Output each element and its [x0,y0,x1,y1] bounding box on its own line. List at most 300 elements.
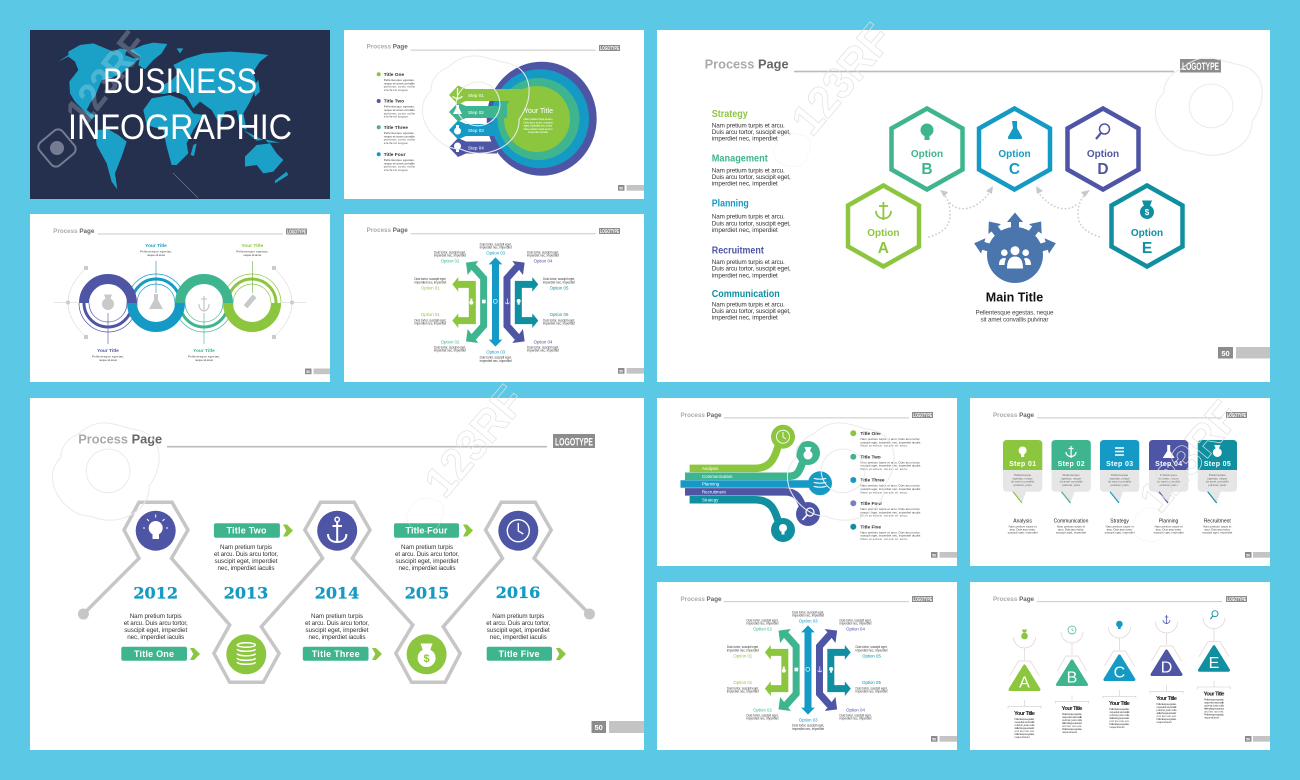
option labels: imperdiet nec, imperdiet [543,280,575,284]
option labels: imperdiet nec, imperdiet [543,322,575,326]
card: step 03 [1100,440,1139,503]
left legend: Title Four [384,152,406,158]
timeline body text: suscipit eget, imperdiet [487,627,550,634]
hexagon E: E [1142,240,1152,257]
card captions: Nam pretium turpis et [1057,524,1085,528]
card: step 01: pulvinar, justo [1014,483,1032,487]
option labels: imperdiet nec, imperdiet [746,717,779,721]
hexagon B: Option [911,149,943,160]
triangle E: Your Title [1204,692,1225,698]
right text list: suscipit eget, imperdiet nec, imperdiet iaculis [860,510,921,514]
card captions: Analysis [1013,519,1032,525]
card captions: Nam pretium turpis et [1009,524,1037,528]
icon: money bag 2015: $ [424,653,430,665]
header: LOGOTYPE [1227,597,1246,603]
footer page number: 50 [619,370,623,374]
option labels: Duis tortor, suscipit eget, [746,713,779,717]
card: step 02: Step 02 [1058,461,1085,468]
timeline body text [124,544,551,641]
triangle C: eleifend augue, ac auctor [1109,716,1129,720]
option labels: Duis tortor, suscipit eget, [855,645,888,649]
footer page number [592,721,644,733]
right text list: Title Two [860,454,881,460]
watermark overlay: 123RF [57,24,157,134]
header [680,412,933,419]
card captions: suscipit eget, imperdiet [1056,530,1086,534]
footer page number [1245,552,1270,558]
option labels: Option 01 [733,653,753,658]
card captions: suscipit eget, imperdiet [1105,530,1135,534]
option labels [414,242,575,363]
option labels: Option 02 [441,340,460,345]
branch labels: Strategy [702,497,719,502]
left text list: imperdiet nec, imperdiet [712,136,778,143]
left text list: Duis arcu tortor, suscipit eget, [712,266,791,273]
option labels: Option 04 [846,627,865,632]
triangle A: eleifend augue, ac auctor [1014,726,1035,730]
triangle C: orci leo non est. [1109,719,1130,723]
option labels: Option 01 [421,312,440,317]
footer page number: 50 [1246,554,1250,558]
left text list: Management [712,154,768,164]
panel: linked rings [30,214,330,382]
left legend: eleifend augue [384,141,408,145]
option labels: Option 03 [799,718,818,723]
main title [976,290,1054,324]
card captions: arcu. Duis arcu tortor, [1058,528,1084,532]
header: LOGOTYPE [913,597,932,603]
option labels: Duis tortor, suscipit eget, [839,618,872,622]
option labels: Duis tortor, suscipit eget, [839,713,872,717]
option labels: imperdiet nec, imperdiet [527,254,559,258]
option labels: Option 01 [421,285,440,290]
timeline body text: Nam pretium turpis [401,544,453,551]
step arrows [449,86,522,157]
panel: timeline [30,398,644,750]
triangle E: E [1209,655,1219,672]
card: step 04: Step 04 [1155,461,1182,468]
card captions: Nam pretium turpis et [1155,524,1183,528]
left legend: pulvinar, justo nulla [384,138,415,142]
option labels: Duis tortor, suscipit eget, [480,242,512,246]
triangle C: neque sit amet [1109,725,1125,729]
step arrows: Step 04 [468,146,484,150]
right text list: Title One [860,431,881,437]
triangle D: neque sit amet convallis [1156,705,1177,709]
panel: step cards [970,398,1270,566]
option labels: Option 02 [753,627,772,632]
right text list: Title Five [860,524,881,530]
option labels: Duis tortor, suscipit eget, [543,318,575,322]
hexagon E [1112,186,1182,266]
card captions: Strategy [1110,519,1129,525]
card captions: arcu. Duis arcu tortor, [1156,528,1182,532]
option labels: imperdiet nec, imperdiet [434,254,466,258]
header [367,45,620,52]
branch labels: Analysis [702,466,719,471]
right text list [850,430,921,541]
left legend: neque sit amet convallis [384,81,415,85]
left text list: Recruitment [712,246,764,256]
icon: coin stack 2013 [226,634,266,674]
title pills with chevrons [121,523,566,661]
icon: anchor 2014 [317,511,357,551]
option labels: Duis tortor, suscipit eget, [792,610,824,614]
option labels: Duis tortor, suscipit eget, [527,250,559,254]
triangle D: Pellentesque egestas, [1156,717,1177,721]
arrow icons [782,666,833,673]
left text list: Duis arcu tortor, suscipit eget, [712,174,791,181]
option labels: imperdiet nec, imperdiet [839,717,872,721]
footer page number: 50 [619,186,623,190]
left text list: Duis arcu tortor, suscipit eget, [712,220,791,227]
option labels: Duis tortor, suscipit eget, [434,250,466,254]
left text list: Nam pretium turpis et arcu. [712,214,785,221]
card captions: Planning [1159,519,1179,525]
card captions [1008,519,1232,534]
card: step 03: egestas, neque [1110,476,1130,480]
side decoration arcs [54,266,306,339]
option labels: Duis tortor, suscipit eget, [414,277,446,281]
zigzag hexagon line [78,502,595,682]
card: step 02: egestas, neque [1061,476,1081,480]
panel: radial arrows [344,214,644,382]
card: step 04: pulvinar, justo [1160,483,1178,487]
right text list: suscipit eget, imperdiet nec, imperdiet iaculis [860,464,921,468]
header: Process Page [367,45,408,51]
ring icons [102,294,256,311]
triangle E: eleifend augue, ac auctor [1204,707,1224,711]
left legend: pulvinar, justo nulla [384,165,415,169]
ring labels: Pellentesque egestas, [188,354,220,358]
card captions: Nam pretium turpis et [1106,524,1134,528]
triangle C: Pellentesque egestas, [1109,722,1130,726]
circle title text: Nam pretium turpis et arcu [524,127,553,131]
timeline body text: et arcu. Duis arcu tortor, [214,551,278,558]
option labels: Option 03 [799,619,818,624]
triangle A: Your Title [1014,711,1036,717]
arrow diagram [727,610,888,731]
header [705,56,1221,73]
option labels: imperdiet nec, imperdiet [792,727,824,731]
timeline body text: nec, imperdiet iaculis [127,634,184,641]
icon: clock 2016 [498,511,538,551]
triangle A: Pellentesque egestas, [1014,732,1035,736]
hexagon E: $ [1145,208,1150,217]
arrow diagram [414,242,575,363]
step arrows: Step 03 [468,128,484,133]
hexagon D: Option [1087,149,1119,160]
header: LOGOTYPE [913,413,932,419]
cover title: INFOGRAPHIC [68,108,292,147]
right text list: Nam pretium turpis et arcu. [860,514,909,518]
ring labels [92,243,268,362]
triangle D: eleifend augue, ac auctor [1156,711,1177,715]
triangle D: Pellentesque egestas, [1156,702,1177,706]
ring labels: neque sit amet [99,358,117,362]
left text list: Nam pretium turpis et arcu. [712,122,785,129]
card captions: arcu. Duis arcu tortor, [1107,528,1133,532]
card: step 02: sit amet convallis [1060,480,1083,484]
left text list: Communication [712,289,780,300]
right text list: Title Four [860,501,882,507]
left legend: pulvinar, justo nulla [384,85,415,89]
right text list: Nam pretium turpis et arcu. Duis arcu tortor, [860,484,921,488]
triangle E: neque sit amet [1204,716,1219,720]
footer page number [931,736,957,742]
years: 2013 [224,584,268,602]
footer page number [931,552,957,558]
ring labels: Your Title [241,243,263,249]
footer page number [618,185,644,191]
left text list: imperdiet nec, imperdiet [712,181,778,188]
triangle D: neque sit amet [1156,720,1172,724]
header: Process Page [705,56,789,72]
arrow icons [469,298,521,305]
hexagon A: Option [867,228,900,239]
header [367,228,620,235]
card captions: suscipit eget, imperdiet [1008,530,1038,534]
ring labels: neque sit amet [147,253,165,257]
card: step 04: Pellentesque [1160,473,1177,477]
title pills with chevrons: Title Two [226,526,267,536]
option labels: imperdiet nec, imperdiet [527,349,559,353]
step arrows: Step 02 [468,110,484,115]
right text list: suscipit eget, imperdiet nec, imperdiet iaculis [860,534,921,538]
option labels: Duis tortor, suscipit eget, [414,318,446,322]
left legend: pulvinar, justo nulla [384,111,415,115]
card: step 05: Step 05 [1204,461,1231,468]
left text list: Nam pretium turpis et arcu. [712,259,785,266]
option labels: imperdiet nec, imperdiet [480,246,512,250]
left text list: Strategy [712,109,748,120]
title pills with chevrons: Title One [134,649,174,659]
option labels: Duis tortor, suscipit eget, [792,724,824,728]
cover title [68,62,292,147]
ring labels: Pellentesque egestas, [92,354,124,358]
watermark overlay: 123RF [415,377,535,506]
triangle C [1103,621,1136,729]
header: Process Page [993,413,1035,419]
concentric circles [487,62,597,176]
triangle D: D [1161,660,1172,676]
card: step 04: sit amet convallis [1157,480,1181,484]
world map [58,43,288,189]
triangle D: Your Title [1156,696,1178,702]
left legend: eleifend augue [384,115,408,119]
hexagon C [979,108,1050,190]
option labels: Option 05 [550,285,569,290]
cover title: BUSINESS [103,62,257,101]
option labels: imperdiet nec, imperdiet [480,359,512,363]
triangle B: orci leo non est. [1062,724,1082,728]
option labels: imperdiet nec, imperdiet [855,690,888,694]
card: step 02: pulvinar, justo [1062,483,1080,487]
footer page number: 50 [932,738,936,742]
option labels: Option 02 [753,708,772,713]
header: Process Page [993,597,1035,603]
triangle C: Pellentesque egestas, [1109,707,1130,711]
card: step 05: sit amet convallis [1206,480,1229,484]
circle title text: Duis arcu tortor, suscipit [524,120,553,124]
option labels: imperdiet nec, imperdiet [434,349,466,353]
left legend: neque sit amet convallis [384,108,415,112]
timeline body text: nec, imperdiet iaculis [398,565,456,572]
card: step 05 [1198,440,1237,503]
footer page number: 50 [1246,738,1250,742]
connector arrows [108,261,252,344]
option labels: Duis tortor, suscipit eget, [727,686,759,690]
header [78,432,595,448]
branch labels: Planning [702,482,720,487]
triangle D [1150,615,1183,724]
timeline body text: et arcu. Duis arcu tortor, [395,551,459,558]
title pills with chevrons: Title Three [312,649,360,659]
ring labels: Your Title [193,348,215,354]
hexagon A: A [878,240,889,257]
right text list: Nam pretium turpis et arcu. [860,537,909,541]
option labels: imperdiet nec, imperdiet [792,614,824,618]
circle title text [524,108,553,134]
left text list: Nam pretium turpis et arcu. [712,301,785,308]
timeline body text: suscipit eget, imperdiet [396,558,459,565]
option labels: imperdiet nec, imperdiet [839,622,872,626]
triangle B: B [1067,670,1077,686]
option labels: Option 05 [862,680,881,685]
triangle E [1198,611,1230,720]
years: 2014 [315,584,359,602]
right text list: Nam pretium turpis et arcu. [860,444,909,448]
card: step 01: sit amet convallis [1011,480,1035,484]
years: 2015 [405,584,449,602]
triangle A: A [1019,674,1030,692]
timeline body text: suscipit eget, imperdiet [124,627,187,634]
right text list: Nam pretium turpis et arcu. Duis arcu tortor, [860,530,921,534]
triangle C: neque sit amet convallis [1109,710,1130,714]
left legend: eleifend augue [384,88,408,92]
option labels: Duis tortor, suscipit eget, [543,277,575,281]
left text list: Duis arcu tortor, suscipit eget, [712,129,791,136]
panel: branching process [657,398,957,566]
footer page number: 50 [306,370,310,374]
footer page number [1218,347,1270,358]
timeline body text: et arcu. Duis arcu tortor, [305,620,369,627]
option labels: Option 05 [550,312,569,317]
header: Process Page [53,229,95,235]
main title: Main Title [986,290,1043,304]
hexagon B [892,108,962,190]
triangle A: neque sit amet [1014,735,1030,739]
branch labels: Recruitment [702,490,726,494]
panel: radial arrows second [657,582,957,750]
branch labels: Communication [702,474,733,479]
header: LOGOTYPE [1227,413,1246,419]
panel: cover with world map [30,30,330,199]
timeline body text: nec, imperdiet iaculis [490,634,547,641]
card: step 01: egestas, neque [1013,476,1033,480]
icon: money bag 2015 [407,634,447,674]
timeline body text: Nam pretium turpis [311,613,363,620]
card captions: suscipit eget, imperdiet [1202,530,1232,534]
triangle A: pulvinar, justo nulla [1014,723,1035,727]
triangle C: C [1114,664,1125,682]
timeline body text: Nam pretium turpis [492,613,544,620]
option labels: Option 04 [534,340,553,345]
card captions: Communication [1054,519,1089,525]
triangle A: Pellentesque egestas, [1014,717,1035,721]
footer page number: 50 [932,554,936,558]
option labels: Duis tortor, suscipit eget, [746,618,779,622]
thin ring halves [79,274,281,332]
circle title text: eget, imperdiet nec, imper [524,124,553,128]
footer page number [1245,736,1270,742]
right text list: Nam pretium turpis et arcu. [860,467,909,471]
hexagon B: B [921,161,933,178]
right text list: Title Three [860,478,885,484]
triangle E: orci leo non est. [1204,710,1224,714]
left legend: neque sit amet convallis [384,134,415,138]
triangle B: neque sit amet [1062,730,1077,734]
timeline body text: nec, imperdiet iaculis [218,565,274,572]
icon: lightbulb 2012 [136,511,176,551]
option labels: Option 02 [441,259,460,264]
watermark overlay: 123RF [1130,392,1250,521]
triangle A: neque sit amet convallis [1014,720,1035,724]
card: step 02 [1052,440,1091,503]
footer page number [618,368,644,374]
triangle B: neque sit amet convallis [1062,715,1083,719]
branches [680,444,815,523]
triangle A [1008,630,1041,739]
triangle B: pulvinar, justo nulla [1062,718,1082,722]
left legend: Pellentesque egestas, [384,131,415,135]
ring labels: neque sit amet [243,253,261,257]
triangle E: neque sit amet convallis [1204,701,1225,705]
circle title text: imperdiet iaculis [528,130,549,134]
panel: stepped triangles [970,582,1270,750]
right text list: suscipit eget, imperdiet nec, imperdiet iaculis [860,440,921,444]
left legend: Title One [384,72,404,78]
ring labels: Pellentesque egestas, [236,250,268,254]
card: step 05: pulvinar, justo [1208,483,1227,487]
triangle E: pulvinar, justo nulla [1204,704,1224,708]
card captions: suscipit eget, imperdiet [1154,530,1184,534]
left text list: Duis arcu tortor, suscipit eget, [712,308,791,315]
header [993,596,1247,603]
left text list: imperdiet nec, imperdiet [712,315,778,322]
left legend: Pellentesque egestas, [384,105,415,109]
timeline body text: suscipit eget, imperdiet [214,558,278,565]
left legend: Title Three [384,125,408,131]
option labels: Duis tortor, suscipit eget, [434,345,466,349]
footer page number [305,368,330,374]
option labels: Option 04 [534,259,553,264]
card: step 01: Pellentesque [1014,473,1031,477]
triangle D: pulvinar, justo nulla [1156,708,1177,712]
left legend [377,72,415,172]
timeline body text: Nam pretium turpis [130,613,182,620]
branch nodes with icons [771,425,832,542]
header: Process Page [367,228,408,234]
left legend: neque sit amet convallis [384,161,415,165]
years: 2016 [496,583,540,602]
option labels [727,610,888,731]
option labels: Duis tortor, suscipit eget, [527,345,559,349]
card: step 04: egestas, neque [1159,476,1179,480]
years [133,583,540,602]
years: 2012 [133,584,178,602]
option labels: imperdiet nec, imperdiet [414,280,446,284]
